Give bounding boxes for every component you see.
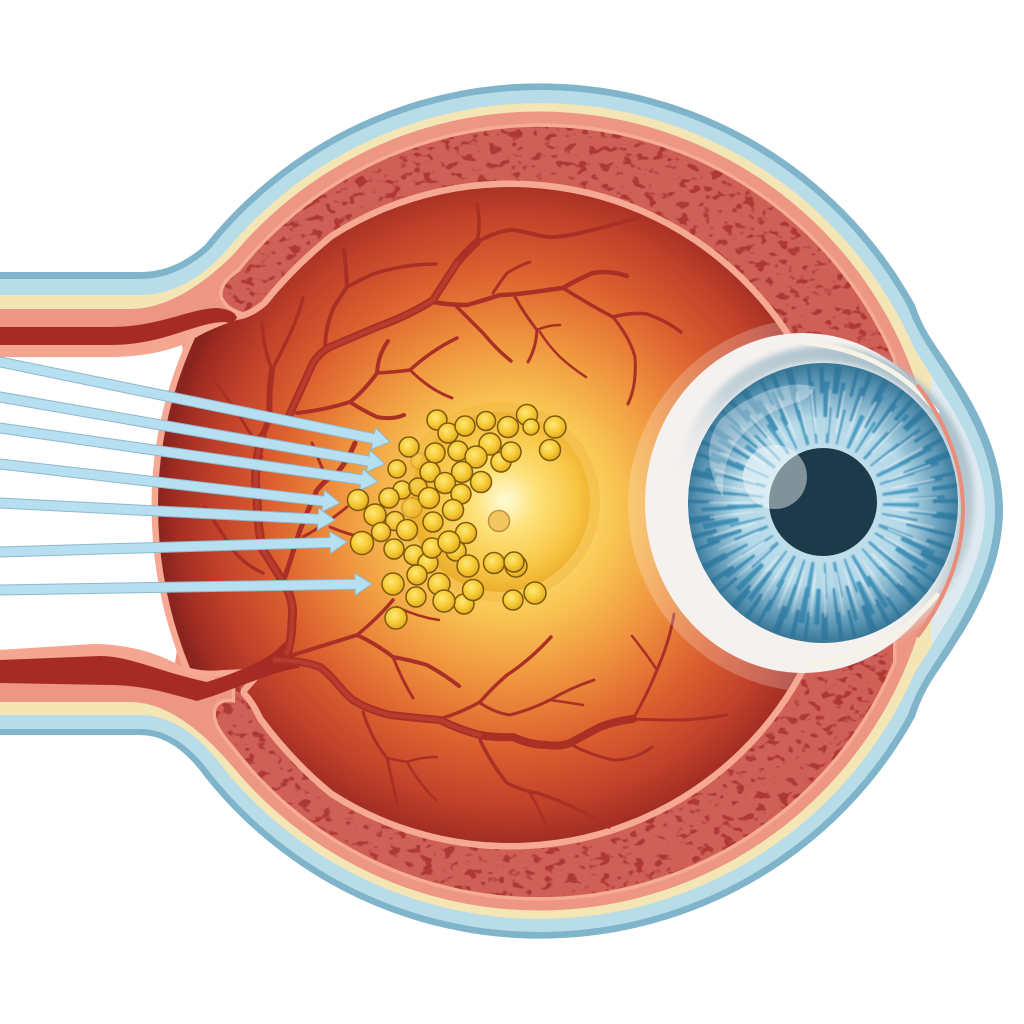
macula halo [400, 402, 600, 602]
eyeball glow band [628, 322, 798, 690]
arrow 7 [0, 573, 372, 601]
salmon layer [0, 112, 963, 910]
iris crescent highlight [709, 385, 815, 497]
pupil highlight [743, 445, 807, 509]
retinal blood vessels [205, 204, 727, 836]
cream layer [0, 103, 933, 919]
lower nerve inner wall [0, 644, 232, 684]
arrow 5 [0, 491, 336, 531]
white gap between nerve walls [0, 343, 200, 663]
upper nerve inner wall [0, 318, 240, 357]
pupil [769, 448, 877, 556]
retina cavity [158, 187, 838, 843]
arrow 4 [0, 451, 341, 514]
iris [688, 363, 958, 643]
light blue outer layer [0, 90, 995, 932]
lower optic nerve vessel [0, 640, 300, 701]
sclera highlights [807, 343, 937, 664]
upper optic nerve vessel [0, 308, 237, 345]
sclera shading [680, 354, 966, 652]
arrow 1 [0, 351, 392, 453]
vessel trunk highlights [255, 263, 480, 735]
retina pink border [158, 187, 838, 843]
choroid band with texture [216, 127, 893, 897]
arrow 6 [0, 531, 347, 563]
choroid band border [216, 127, 893, 897]
cornea [931, 376, 985, 646]
sclera [645, 333, 961, 673]
macula [410, 412, 590, 592]
golden deposits cluster [348, 404, 566, 629]
corneal rim line [917, 385, 963, 637]
iris fibres [699, 379, 947, 627]
arrow 2 [0, 385, 387, 475]
incoming light arrows [0, 351, 392, 601]
arrow 3 [0, 415, 380, 493]
